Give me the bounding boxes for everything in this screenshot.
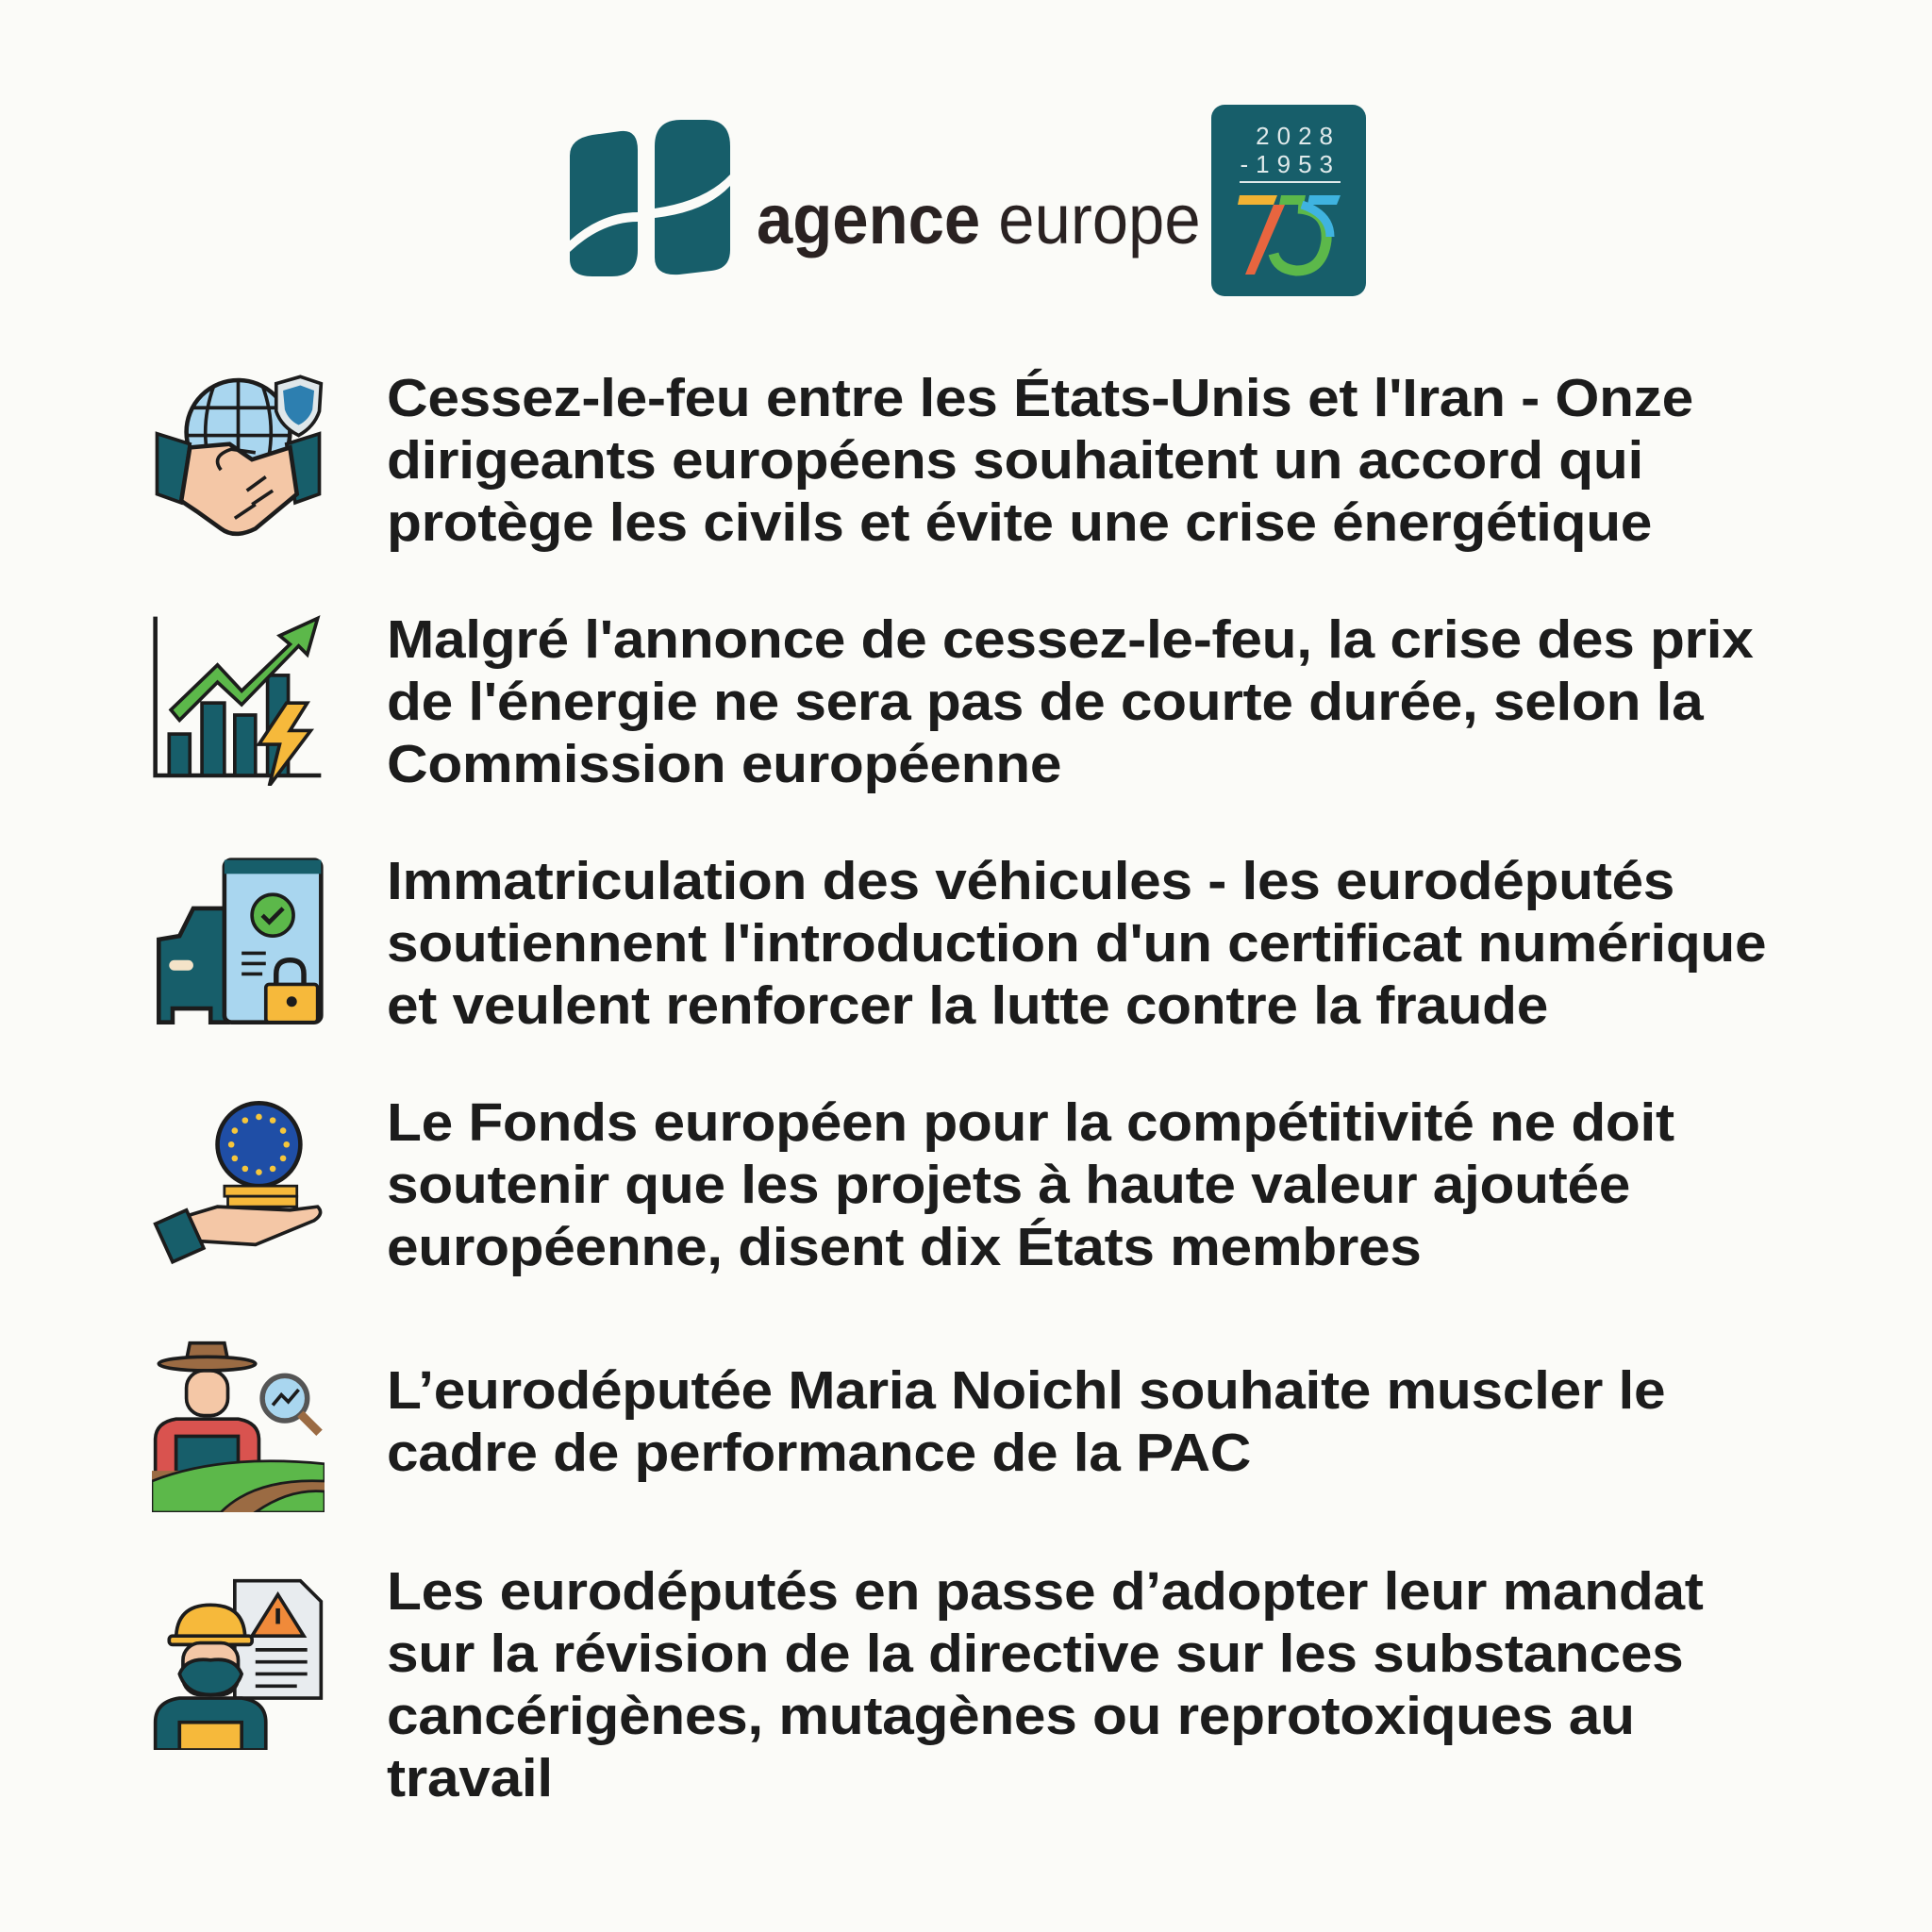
- headline 6: sur la révision de la directive sur les substances: [387, 1624, 1683, 1684]
- headline 3: [387, 851, 1766, 1036]
- headline 1: Cessez-le-feu entre les États-Unis et l'Iran - Onze: [387, 368, 1693, 428]
- headline 1: protège les civils et évite une crise énergétique: [387, 492, 1652, 553]
- headline 3: soutiennent l'introduction d'un certificat numérique: [387, 913, 1766, 974]
- headline 1: dirigeants européens souhaitent un accord qui: [387, 430, 1643, 491]
- icon: worker with hazard document: [153, 1579, 323, 1750]
- headline 4: européenne, disent dix États membres: [387, 1217, 1422, 1277]
- headline 5: [387, 1360, 1665, 1483]
- headline 5: cadre de performance de la PAC: [387, 1423, 1251, 1483]
- headline 5: L’eurodéputée Maria Noichl souhaite muscler le: [387, 1360, 1665, 1421]
- headline 2: Malgré l'annonce de cessez-le-feu, la crise des prix: [387, 609, 1754, 670]
- logo: agence europe: [570, 105, 1366, 296]
- headline 3: Immatriculation des véhicules - les eurodéputés: [387, 851, 1674, 911]
- headline 4: soutenir que les projets à haute valeur ajoutée: [387, 1155, 1630, 1215]
- headline 2: [387, 609, 1754, 794]
- icon: farmer with magnifier: [152, 1341, 325, 1512]
- icon: energy price chart: [153, 615, 321, 786]
- badge 75: -1953: [1240, 150, 1341, 178]
- logo wordmark: agence europe: [757, 180, 1201, 258]
- icon: handshake with globe: [155, 375, 323, 536]
- headline 2: Commission européenne: [387, 734, 1061, 794]
- headline 1: [387, 368, 1693, 553]
- headline 4: [387, 1092, 1674, 1277]
- logo mark: [570, 120, 730, 276]
- headline 6: travail: [387, 1748, 553, 1808]
- headline 2: de l'énergie ne sera pas de courte durée, selon la: [387, 672, 1703, 732]
- icon: EU coin in hand: [153, 1101, 323, 1264]
- headline 6: [387, 1561, 1704, 1808]
- badge 75: [1211, 105, 1366, 296]
- badge 75: 2028: [1256, 122, 1341, 150]
- headline 6: cancérigènes, mutagènes ou reprotoxiques au: [387, 1686, 1635, 1746]
- icon: car digital certificate: [157, 858, 324, 1024]
- headline 3: et veulent renforcer la lutte contre la fraude: [387, 975, 1548, 1036]
- headline 6: Les eurodéputés en passe d’adopter leur mandat: [387, 1561, 1704, 1622]
- headline 4: Le Fonds européen pour la compétitivité ne doit: [387, 1092, 1674, 1153]
